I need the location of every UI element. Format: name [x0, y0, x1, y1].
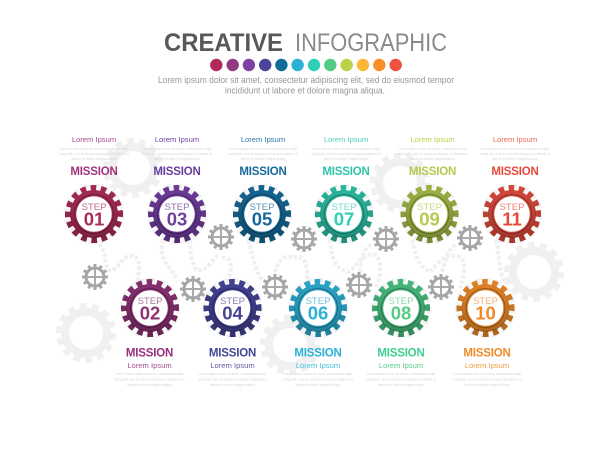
step 08: STEP: [389, 296, 413, 307]
title: INFOGRAPHIC: [295, 29, 447, 57]
text block: step 05: scing elit, sed do eiusmod tempor incididunt ut: [228, 152, 298, 156]
step 03: [149, 186, 205, 242]
text block: step 05: MISSION: [239, 166, 287, 178]
step 06: [290, 280, 346, 336]
text block: step 05: [228, 135, 298, 178]
step 07: [316, 186, 372, 242]
connecting chains: [95, 240, 506, 288]
text block: step 02: Lorem Ipsum: [127, 361, 172, 370]
text block: step 10: MISSION: [463, 348, 511, 360]
subtitle: [158, 75, 454, 96]
text block: step 08: Lorem Ipsum: [379, 361, 423, 370]
text block: step 08: MISSION: [377, 348, 425, 360]
text block: step 03: Lorem ipsum dolor sit amet, consectetur adipi: [143, 147, 211, 151]
text block: step 01: Lorem ipsum dolor sit amet, consectetur adipi: [60, 147, 128, 151]
step 11: STEP: [500, 202, 524, 213]
text block: step 07: Lorem Ipsum: [324, 135, 368, 144]
subtitle: Lorem ipsum dolor sit amet, consectetur adipiscing elit, sed do eiusmod tempor: [158, 75, 454, 86]
text block: step 01: [59, 135, 129, 178]
text block: step 09: scing elit, sed do eiusmod tempor incididunt ut: [398, 152, 467, 156]
text block: step 09: [398, 135, 467, 178]
text block: step 02: Lorem ipsum dolor sit amet, consectetur adipi: [115, 372, 184, 376]
step 01: STEP: [82, 202, 106, 213]
text block: step 07: [311, 135, 381, 178]
text block: step 08: labore et dolore magna aliqua: [379, 383, 424, 387]
step 11: 11: [502, 208, 522, 230]
text block: step 10: [452, 348, 522, 387]
text block: step 09: MISSION: [409, 166, 456, 178]
step 04: [204, 280, 260, 336]
step 02: 02: [140, 302, 160, 324]
text block: step 01: labore et dolore magna aliqua: [72, 157, 117, 161]
title: [164, 29, 447, 57]
text block: step 06: Lorem ipsum dolor sit amet, consectetur adipi: [284, 372, 352, 376]
text block: step 04: [198, 348, 267, 387]
text block: step 05: Lorem ipsum dolor sit amet, consectetur adipi: [229, 147, 297, 151]
text block: step 08: [366, 348, 436, 387]
text block: step 06: [283, 348, 353, 387]
text block: step 04: MISSION: [209, 348, 256, 360]
text block: step 07: MISSION: [322, 166, 370, 178]
step 03: STEP: [165, 202, 189, 213]
text block: step 11: MISSION: [491, 166, 539, 178]
text block: step 03: Lorem Ipsum: [155, 135, 199, 144]
step 05: [234, 186, 290, 242]
background pale gears: [58, 140, 562, 372]
text block: step 01: scing elit, sed do eiusmod tempor incididunt ut: [59, 152, 129, 156]
text block: step 02: [115, 348, 184, 387]
text block: step 03: MISSION: [153, 166, 201, 178]
step 05: STEP: [250, 202, 274, 213]
step 04: 04: [222, 302, 243, 324]
text block: step 09: Lorem Ipsum: [410, 135, 455, 144]
step 05: 05: [252, 208, 272, 230]
text block: step 04: scing elit, sed do eiusmod tempor incididunt ut: [198, 378, 267, 382]
text block: step 01: MISSION: [70, 166, 118, 178]
text block: step 11: [480, 135, 550, 178]
step 07: STEP: [332, 202, 356, 213]
text block: step 06: Lorem Ipsum: [296, 361, 340, 370]
step 02: [122, 280, 178, 336]
text block: step 11: Lorem Ipsum: [493, 135, 537, 144]
step 01: 01: [84, 208, 104, 230]
text block: step 01: Lorem Ipsum: [72, 135, 116, 144]
step 07: 07: [334, 208, 354, 230]
step 09: STEP: [417, 202, 442, 213]
text block: step 10: Lorem Ipsum: [465, 361, 509, 370]
small connector gears: [84, 226, 482, 300]
step 10: 10: [475, 302, 496, 324]
text block: step 02: labore et dolore magna aliqua: [127, 383, 172, 387]
step 04: STEP: [220, 296, 245, 307]
text block: step 06: labore et dolore magna aliqua: [296, 383, 341, 387]
text block: step 07: Lorem ipsum dolor sit amet, consectetur adipi: [312, 147, 380, 151]
text block: step 02: scing elit, sed do eiusmod tempor incididunt ut: [115, 378, 184, 382]
text block: step 03: labore et dolore magna aliqua: [155, 157, 200, 161]
text block: step 07: scing elit, sed do eiusmod tempor incididunt ut: [311, 152, 381, 156]
text block: step 05: labore et dolore magna aliqua: [241, 157, 286, 161]
text block: step 09: labore et dolore magna aliqua: [410, 157, 455, 161]
text block: step 10: scing elit, sed do eiusmod tempor incididunt ut: [452, 378, 522, 382]
subtitle: incididunt ut labore et dolore magna aliqua.: [225, 86, 385, 96]
text block: step 06: scing elit, sed do eiusmod tempor incididunt ut: [283, 378, 353, 382]
title: CREATIVE: [164, 29, 283, 57]
text block: step 11: scing elit, sed do eiusmod tempor incididunt ut: [480, 152, 550, 156]
text block: step 06: MISSION: [294, 348, 342, 360]
text block: step 09: Lorem ipsum dolor sit amet, consectetur adipi: [398, 147, 467, 151]
step 03: 03: [167, 208, 187, 230]
text block: step 03: scing elit, sed do eiusmod tempor incididunt ut: [142, 152, 212, 156]
step 11: [484, 186, 540, 242]
text block: step 11: labore et dolore magna aliqua: [493, 157, 538, 161]
step 06: 06: [308, 302, 328, 324]
step 01: [66, 186, 122, 242]
step 10: [458, 280, 514, 336]
text block: step 02: MISSION: [126, 348, 173, 360]
text block: step 04: labore et dolore magna aliqua: [210, 383, 255, 387]
step 06: STEP: [306, 296, 330, 307]
text block: step 05: Lorem Ipsum: [241, 135, 285, 144]
text block: step 10: labore et dolore magna aliqua: [465, 383, 510, 387]
step 09: 09: [419, 208, 440, 230]
text block: step 04: Lorem Ipsum: [210, 361, 255, 370]
text block: step 10: Lorem ipsum dolor sit amet, consectetur adipi: [453, 372, 521, 376]
step 08: [373, 280, 429, 336]
step 08: 08: [391, 302, 411, 324]
step 10: STEP: [473, 296, 498, 307]
text block: step 11: Lorem ipsum dolor sit amet, consectetur adipi: [481, 147, 549, 151]
step 09: [402, 186, 458, 242]
text block: step 08: scing elit, sed do eiusmod tempor incididunt ut: [366, 378, 436, 382]
text block: step 04: Lorem ipsum dolor sit amet, consectetur adipi: [198, 372, 267, 376]
text block: step 03: [142, 135, 212, 178]
step 02: STEP: [138, 296, 162, 307]
colour dots: [210, 59, 402, 71]
text block: step 08: Lorem ipsum dolor sit amet, consectetur adipi: [367, 372, 435, 376]
text block: step 07: labore et dolore magna aliqua: [324, 157, 369, 161]
